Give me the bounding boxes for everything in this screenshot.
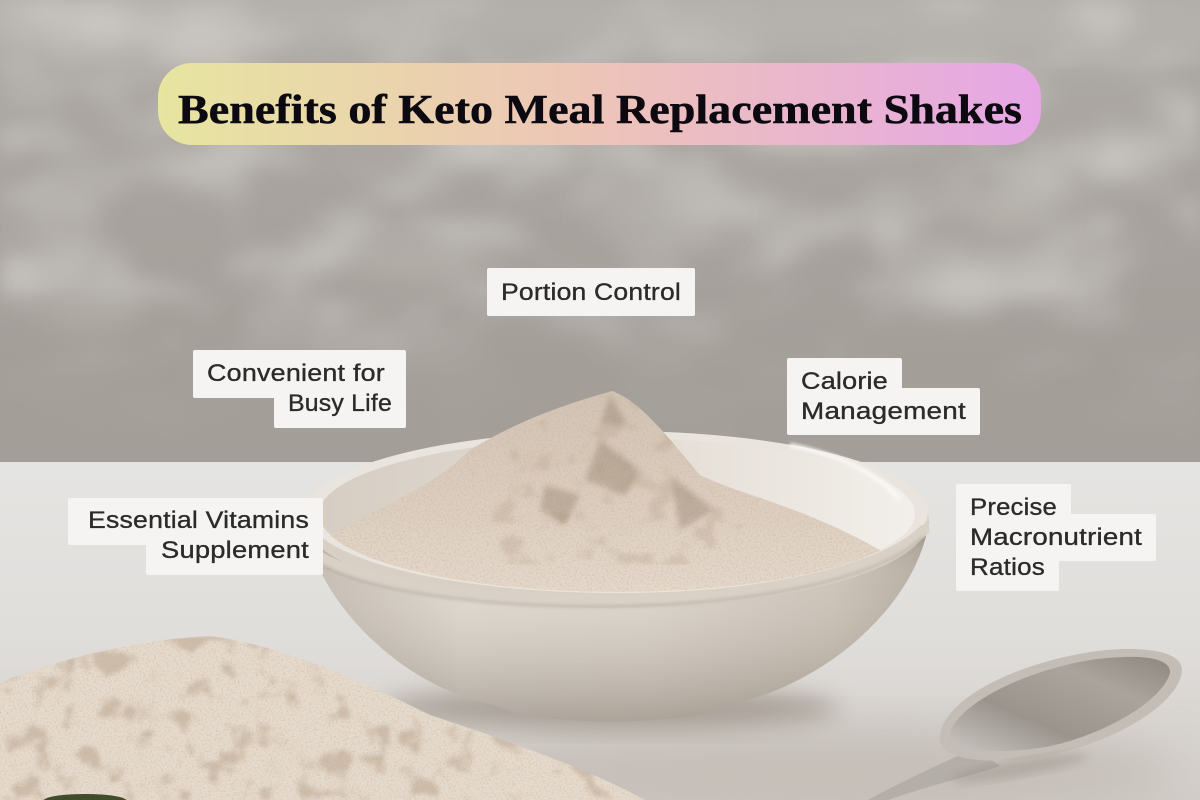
bowl with powder <box>305 391 929 722</box>
powder in bowl <box>322 391 880 600</box>
label: Precise Macronutrient Ratios: Precise <box>970 494 1057 521</box>
label: Essential Vitamins Supplement: Supplement <box>161 537 309 564</box>
bowl body <box>305 522 929 722</box>
label: Convenient for Busy Life: Busy Life <box>288 390 392 417</box>
label: Calorie Management: Calorie <box>801 368 888 395</box>
label: Essential Vitamins Supplement <box>68 498 323 575</box>
title banner <box>158 63 1041 145</box>
label: Portion Control <box>487 268 695 316</box>
label: Precise Macronutrient Ratios: Ratios <box>970 554 1045 581</box>
label: Portion Control: Portion Control <box>501 279 681 306</box>
title: Benefits of Keto Meal Replacement Shakes <box>178 86 1022 132</box>
spoon <box>868 649 1182 800</box>
table <box>0 462 1200 800</box>
bowl rim <box>305 432 929 608</box>
wall <box>0 0 1200 464</box>
bowl front lip <box>312 530 924 600</box>
label: Convenient for Busy Life <box>193 350 406 428</box>
label: Calorie Management <box>787 358 980 435</box>
label: Calorie Management: Management <box>801 398 966 425</box>
leaf <box>43 794 127 800</box>
label: Precise Macronutrient Ratios: Macronutrient <box>970 524 1142 551</box>
powder pile foreground <box>0 636 645 800</box>
label: Precise Macronutrient Ratios <box>956 484 1156 591</box>
label: Convenient for Busy Life: Convenient for <box>207 360 385 387</box>
label: Essential Vitamins Supplement: Essential Vitamins <box>88 507 309 534</box>
